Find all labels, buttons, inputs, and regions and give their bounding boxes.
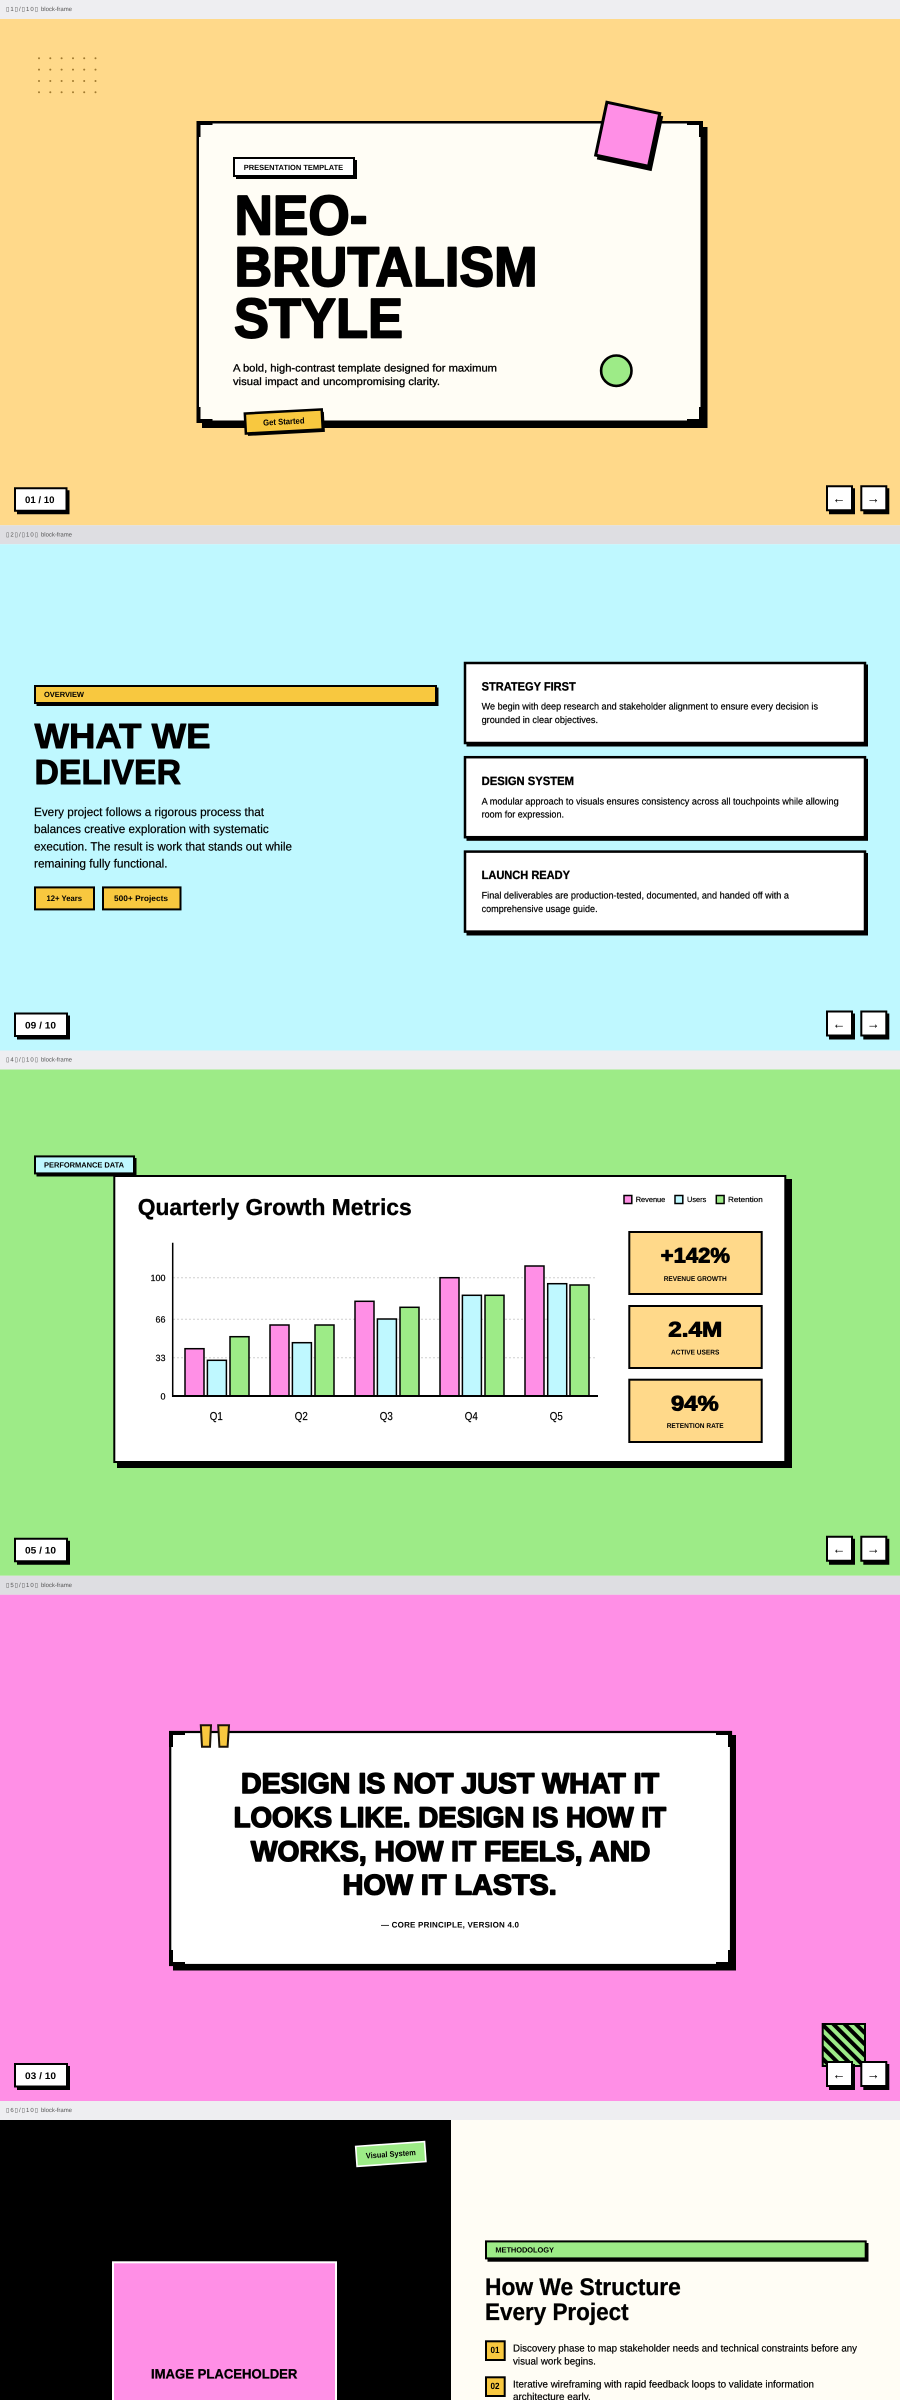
bar chart: Q2 bbox=[295, 1411, 308, 1423]
heading: how we structure: How We Structure bbox=[485, 2274, 681, 2301]
button: get started: Get Started bbox=[263, 415, 305, 428]
quote text: LOOKS LIKE. DESIGN IS HOW IT bbox=[234, 1802, 667, 1834]
navigation arrows: ← bbox=[832, 490, 846, 506]
navigation arrows: → bbox=[867, 1015, 880, 1031]
stat: retention rate: RETENTION RATE bbox=[667, 1423, 724, 1430]
navigation arrows: ← bbox=[832, 1541, 846, 1557]
label: visual system: Visual System bbox=[366, 2148, 416, 2161]
bar chart: 33 bbox=[156, 1353, 166, 1363]
page counter: 01 / 10 bbox=[25, 495, 54, 506]
body paragraph: execution. The result is work that stands out while bbox=[34, 839, 292, 853]
step 01: 01 bbox=[490, 2345, 500, 2355]
navigation arrows: → bbox=[867, 1541, 880, 1557]
bar chart bbox=[150, 1243, 598, 1423]
title card bbox=[196, 121, 708, 428]
frame label bar 2: ▯2▯/▯10▯ bbox=[6, 531, 38, 538]
heading: what we deliver: WHAT WE bbox=[34, 717, 210, 756]
main title: NEO- bbox=[234, 184, 368, 246]
frame label bar 4: block-frame bbox=[41, 1582, 73, 1589]
card: design system bbox=[465, 757, 868, 841]
card: launch ready: Final deliverables are production-tested, documented, and handed off with a bbox=[482, 891, 790, 902]
tag: performance data: PERFORMANCE DATA bbox=[44, 1160, 125, 1170]
card: strategy first bbox=[465, 663, 868, 746]
frame label bar 5: ▯6▯/▯10▯ bbox=[6, 2107, 38, 2114]
pill: 12+ years: 12+ Years bbox=[46, 894, 83, 903]
decorative green circle bbox=[601, 356, 632, 386]
frame label bar 2 bbox=[0, 525, 900, 544]
body paragraph: balances creative exploration with systematic bbox=[34, 822, 269, 836]
label: visual system bbox=[356, 2142, 426, 2166]
tag: presentation template: PRESENTATION TEMPLATE bbox=[244, 163, 343, 172]
pill: 500+ projects: 500+ Projects bbox=[114, 894, 169, 903]
quote text: DESIGN IS NOT JUST WHAT IT bbox=[241, 1768, 660, 1800]
card: design system: room for expression. bbox=[482, 810, 564, 821]
frame label bar 1: ▯1▯/▯10▯ bbox=[6, 6, 38, 13]
subtitle: visual impact and uncompromising clarity. bbox=[233, 376, 440, 388]
tag: methodology: METHODOLOGY bbox=[495, 2246, 554, 2254]
page counter bbox=[15, 488, 70, 514]
attribution: — CORE PRINCIPLE, VERSION 4.0 bbox=[381, 1921, 520, 1930]
stat: retention rate: 94% bbox=[671, 1392, 719, 1415]
chart legend: Users bbox=[687, 1195, 707, 1204]
quote text: HOW IT LASTS. bbox=[343, 1869, 557, 1901]
main title: STYLE bbox=[234, 286, 403, 350]
quote text bbox=[234, 1768, 667, 1901]
pill: 500+ projects bbox=[103, 887, 180, 909]
step 01: visual work begins. bbox=[513, 2357, 596, 2368]
panel: slide 5 methodology bbox=[0, 2120, 900, 2400]
panel: slide 2 what we deliver bbox=[0, 544, 900, 1050]
stat: active users: ACTIVE USERS bbox=[671, 1350, 720, 1356]
card: design system: A modular approach to visuals ensures consistency across all touchpoints while allowing bbox=[482, 796, 839, 807]
navigation arrows bbox=[827, 486, 889, 514]
chart card bbox=[114, 1176, 792, 1468]
frame label bar 5 bbox=[0, 2101, 900, 2120]
card: launch ready: comprehensive usage guide. bbox=[482, 904, 598, 915]
panel: slide 3 performance data bbox=[0, 1070, 900, 1576]
navigation arrows: → bbox=[867, 2066, 880, 2082]
quote card bbox=[169, 1731, 736, 1970]
body paragraph: Every project follows a rigorous process that bbox=[34, 805, 265, 819]
card: launch ready: LAUNCH READY bbox=[482, 868, 570, 882]
heading: what we deliver: DELIVER bbox=[34, 753, 181, 792]
step 01: Discovery phase to map stakeholder needs and technical constraints before any bbox=[513, 2343, 857, 2354]
decorative pink square bbox=[595, 102, 664, 171]
step 01 bbox=[486, 2341, 857, 2368]
chart legend: Revenue bbox=[636, 1195, 665, 1204]
dot pattern bbox=[38, 57, 96, 93]
stat: revenue growth: REVENUE GROWTH bbox=[664, 1276, 727, 1283]
navigation arrows: ← bbox=[832, 1015, 846, 1031]
card: design system: DESIGN SYSTEM bbox=[482, 774, 574, 788]
card: launch ready bbox=[465, 852, 868, 936]
image placeholder bbox=[113, 2262, 336, 2400]
step 02: 02 bbox=[490, 2381, 500, 2391]
bar chart: 0 bbox=[160, 1391, 166, 1401]
bar chart: 100 bbox=[150, 1273, 166, 1283]
subtitle bbox=[233, 362, 497, 388]
stat: revenue growth: +142% bbox=[661, 1245, 730, 1268]
black image column bbox=[0, 2120, 451, 2400]
pill: 12+ years bbox=[35, 887, 94, 909]
frame label bar 4 bbox=[0, 1576, 900, 1595]
panel: slide 4 quote bbox=[0, 1595, 900, 2101]
quote text: WORKS, HOW IT FEELS, AND bbox=[251, 1836, 650, 1868]
bar chart: Q1 bbox=[210, 1411, 223, 1423]
navigation arrows: → bbox=[867, 490, 880, 506]
button: get started bbox=[245, 409, 325, 436]
frame label bar 3: block-frame bbox=[41, 1056, 73, 1064]
subtitle: A bold, high-contrast template designed for maximum bbox=[233, 362, 497, 374]
page counter: 03 / 10 bbox=[25, 2071, 56, 2082]
tag: overview: OVERVIEW bbox=[44, 690, 85, 699]
tag: methodology bbox=[486, 2241, 868, 2262]
frame label bar 4: ▯5▯/▯10▯ bbox=[6, 1582, 38, 1589]
navigation arrows: ← bbox=[832, 2066, 846, 2082]
chart legend: Retention bbox=[728, 1195, 763, 1204]
heading: what we deliver bbox=[34, 717, 210, 792]
tag: overview bbox=[35, 686, 438, 706]
frame label bar 3 bbox=[0, 1050, 900, 1070]
body paragraph bbox=[34, 805, 292, 871]
decorative striped square bbox=[823, 2024, 865, 2066]
stat: retention rate bbox=[629, 1380, 762, 1442]
frame label bar 1 bbox=[0, 0, 900, 19]
bar chart: Q4 bbox=[465, 1411, 478, 1423]
stat: active users bbox=[629, 1306, 762, 1368]
chart title: Quarterly Growth Metrics bbox=[138, 1194, 412, 1220]
step 02: Iterative wireframing with rapid feedback loops to validate information bbox=[513, 2379, 814, 2390]
frame label bar 1: block-frame bbox=[41, 6, 73, 13]
heading: how we structure: Every Project bbox=[485, 2299, 629, 2326]
page counter bbox=[15, 1539, 70, 1565]
card: strategy first: We begin with deep research and stakeholder alignment to ensure every decision is bbox=[482, 702, 818, 712]
panel: slide 1 title bbox=[0, 19, 900, 525]
main title bbox=[234, 184, 538, 350]
chart legend bbox=[624, 1195, 763, 1204]
heading: how we structure bbox=[485, 2274, 681, 2326]
navigation arrows bbox=[827, 2062, 889, 2090]
tag: performance data bbox=[35, 1156, 136, 1176]
bar chart: 66 bbox=[156, 1315, 166, 1325]
tag: presentation template bbox=[234, 158, 357, 179]
page counter: 09 / 10 bbox=[25, 1020, 56, 1031]
image placeholder: IMAGE PLACEHOLDER bbox=[151, 2366, 298, 2382]
frame label bar 3: ▯4▯/▯10▯ bbox=[6, 1056, 38, 1064]
page counter bbox=[15, 1014, 70, 1040]
body paragraph: remaining fully functional. bbox=[34, 857, 168, 871]
navigation arrows bbox=[827, 1012, 889, 1040]
step 02 bbox=[486, 2377, 814, 2400]
frame label bar 2: block-frame bbox=[41, 531, 73, 538]
stat: revenue growth bbox=[629, 1232, 762, 1294]
stat: active users: 2.4M bbox=[668, 1318, 722, 1341]
bar chart: Q5 bbox=[550, 1411, 563, 1423]
main title: BRUTALISM bbox=[234, 235, 538, 298]
card: strategy first: grounded in clear objectives. bbox=[482, 715, 598, 726]
navigation arrows bbox=[827, 1537, 889, 1565]
bar chart: Q3 bbox=[380, 1411, 393, 1423]
icon: quote mark bbox=[201, 1725, 229, 1747]
page counter: 05 / 10 bbox=[25, 1546, 56, 1556]
card: strategy first: STRATEGY FIRST bbox=[482, 680, 576, 694]
frame label bar 5: block-frame bbox=[41, 2107, 73, 2114]
page counter bbox=[15, 2064, 70, 2090]
